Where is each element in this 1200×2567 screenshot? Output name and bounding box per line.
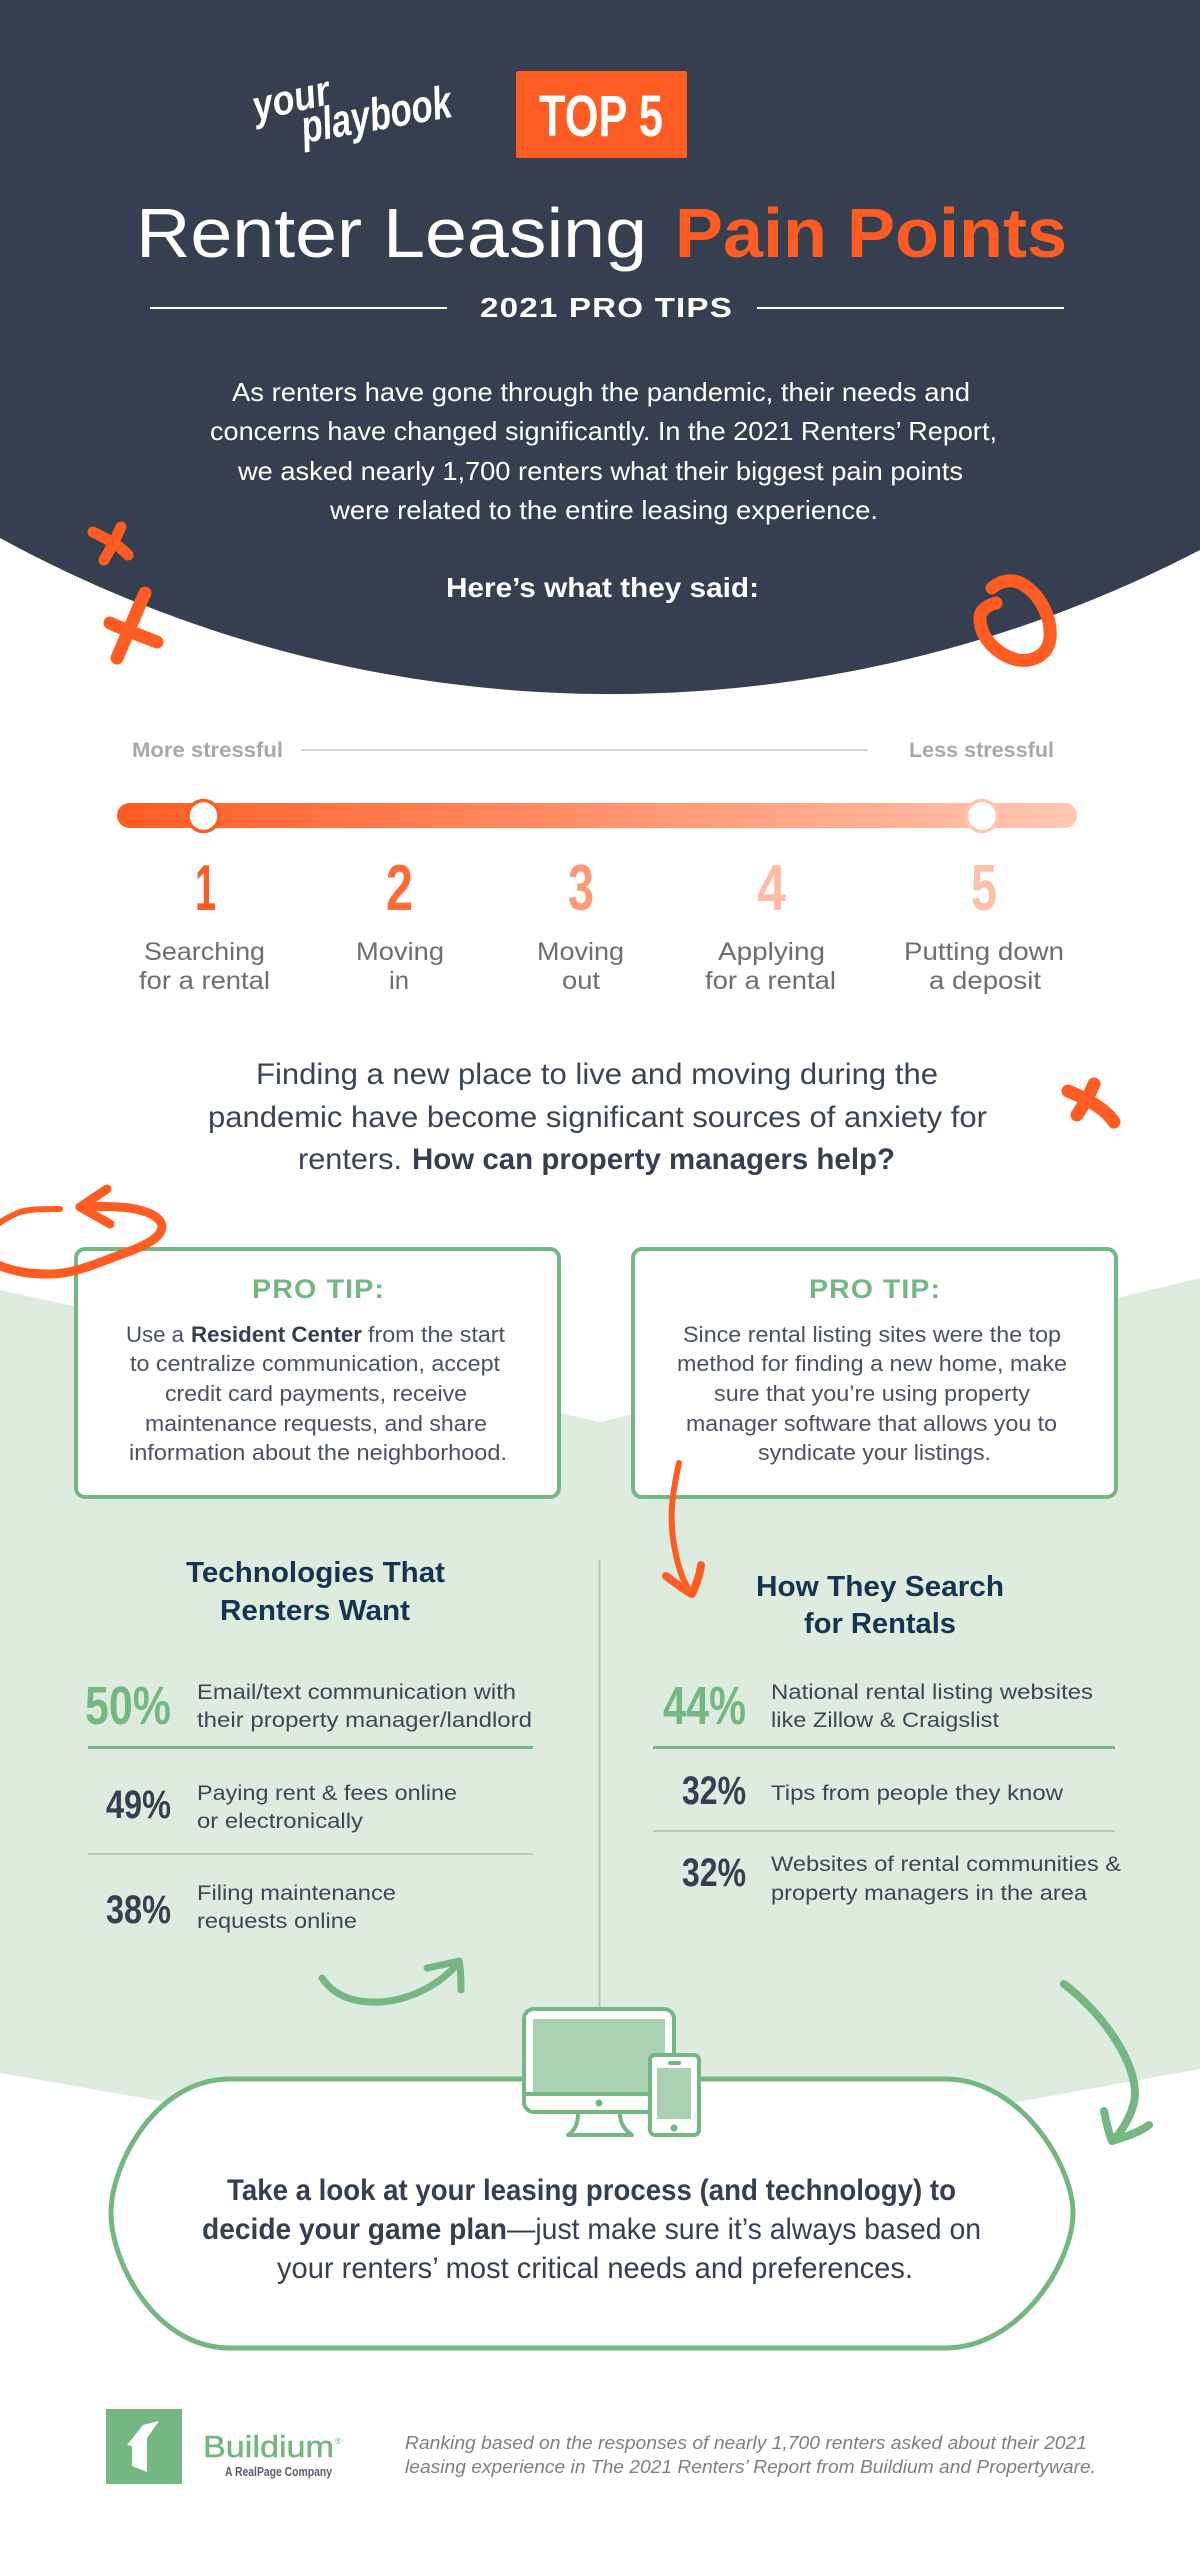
rank 3: moving out: Moving	[537, 938, 624, 966]
heading: how they search for rentals	[756, 1571, 1004, 1640]
panel: closing pill: —just make sure it’s always based on	[507, 2213, 981, 2246]
icon: orange x right	[1068, 1084, 1114, 1122]
transition paragraph	[208, 1058, 987, 1176]
heading: technologies that renters want	[186, 1557, 445, 1627]
icon: green curved arrow	[322, 1961, 461, 2002]
rank 2: moving in: 2	[386, 851, 413, 924]
stress scale labels: More stressful	[132, 739, 283, 762]
rank 2: moving in: in	[389, 967, 409, 995]
gradient stress bar	[117, 800, 1077, 832]
title	[136, 194, 1067, 272]
transition paragraph: How can property managers help?	[412, 1143, 895, 1176]
logo: your playbook: your	[246, 66, 336, 130]
icon: orange circle scribble	[980, 581, 1050, 660]
rank 4: applying for a rental: Applying	[718, 938, 825, 966]
heading: technologies that renters want: Renters Want	[220, 1595, 410, 1627]
panel: closing pill: decide your game plan	[202, 2213, 507, 2246]
logo: buildium	[106, 2409, 342, 2484]
transition paragraph: Finding a new place to live and moving during the	[256, 1058, 938, 1091]
panel: pro tip right: Since rental listing sites were the top	[683, 1322, 1061, 1347]
rank 3: moving out	[537, 851, 624, 995]
stat: 50% email/text: their property manager/landlord	[197, 1708, 532, 1732]
stat: 38% filing maintenance: Filing maintenance	[197, 1881, 396, 1905]
panel: pro tip left: credit card payments, receive	[165, 1381, 467, 1406]
panel: closing pill: your renters’ most critical needs and preferences.	[277, 2252, 913, 2285]
panel: pro tip right: manager software that allows you to	[686, 1411, 1057, 1436]
panel: pro tip right	[633, 1249, 1116, 1497]
footnote: leasing experience in The 2021 Renters’ Report from Buildium and Propertyware.	[405, 2457, 1096, 2477]
heading: how they search for rentals: for Rentals	[804, 1608, 956, 1640]
stat: 44% national listing websites: like Zillow & Craigslist	[771, 1708, 999, 1732]
logo: buildium: ®	[335, 2436, 342, 2446]
intro text: As renters have gone through the pandemic, their needs and	[232, 377, 970, 407]
stat: 49% paying rent	[106, 1781, 457, 1833]
stat: 32% tips from people	[682, 1769, 1064, 1813]
panel: pro tip left: information about the neighborhood.	[129, 1440, 507, 1465]
stat: 50% email/text	[85, 1676, 532, 1736]
panel: pro tip left: Resident Center	[191, 1322, 362, 1347]
stat: 32% tips from people: 32%	[682, 1769, 746, 1813]
logo: your playbook	[246, 66, 457, 153]
intro text	[210, 377, 997, 525]
divider	[598, 1560, 600, 2010]
rank 5: putting down a deposit	[904, 851, 1064, 995]
stress scale labels	[132, 739, 1054, 762]
logo: buildium: Buildium	[203, 2429, 334, 2464]
badge: top 5	[516, 71, 687, 158]
panel: pro tip left: from the start	[368, 1322, 505, 1347]
rank 4: applying for a rental: for a rental	[705, 967, 836, 995]
rank 2: moving in	[356, 851, 444, 995]
stat: 50% email/text: 50%	[85, 1676, 171, 1736]
rank 3: moving out: out	[562, 967, 600, 995]
rank 1: searching for a rental: Searching	[144, 938, 265, 966]
badge: top 5: TOP 5	[539, 84, 663, 149]
panel: pro tip left: Use a	[126, 1322, 185, 1347]
panel: closing pill: Take a look at your leasing process (and technology) to	[227, 2174, 956, 2207]
stat: 49% paying rent: or electronically	[197, 1809, 363, 1833]
intro text: were related to the entire leasing experience.	[329, 495, 878, 525]
stat: 38% filing maintenance: 38%	[106, 1888, 171, 1932]
panel: pro tip left: maintenance requests, and share	[145, 1411, 487, 1436]
header background	[0, 0, 1200, 694]
transition paragraph: pandemic have become significant sources of anxiety for	[208, 1101, 987, 1134]
stat: 32% websites of rental communities: Websites of rental communities &	[771, 1852, 1121, 1876]
stat: 32% websites of rental communities: property managers in the area	[771, 1881, 1087, 1905]
rank 4: applying for a rental	[705, 851, 836, 995]
stress scale labels: Less stressful	[909, 739, 1054, 762]
intro text: concerns have changed significantly. In the 2021 Renters’ Report,	[210, 416, 997, 446]
transition paragraph: renters.	[298, 1143, 402, 1176]
panel: pro tip left: to centralize communication, accept	[130, 1351, 500, 1376]
title: Pain Points	[675, 194, 1067, 272]
intro text: we asked nearly 1,700 renters what their biggest pain points	[237, 456, 963, 486]
subtitle: 2021 pro tips: 2021 PRO TIPS	[480, 292, 733, 323]
panel: pro tip left: PRO TIP:	[252, 1274, 385, 1304]
rank 2: moving in: Moving	[356, 938, 444, 966]
stat: 44% national listing websites: National rental listing websites	[771, 1680, 1093, 1704]
stat: 44% national listing websites: 44%	[663, 1676, 746, 1736]
rank 5: putting down a deposit: Putting down	[904, 938, 1064, 966]
heading: how they search for rentals: How They Search	[756, 1571, 1004, 1603]
stat: 38% filing maintenance	[106, 1881, 396, 1933]
stat: 38% filing maintenance: requests online	[197, 1909, 357, 1933]
green background band	[0, 1278, 1200, 2178]
stat: 50% email/text: Email/text communication with	[197, 1680, 516, 1704]
panel: pro tip right: PRO TIP:	[809, 1274, 941, 1304]
rank 1: searching for a rental: 1	[195, 851, 216, 924]
stat: 49% paying rent: 49%	[106, 1783, 171, 1827]
stat: 32% tips from people: Tips from people they know	[771, 1781, 1064, 1805]
icon: monitor and phone	[524, 2009, 699, 2135]
rank 3: moving out: 3	[568, 851, 594, 924]
stat: 32% websites of rental communities: 32%	[682, 1851, 746, 1895]
rank 1: searching for a rental	[139, 851, 270, 995]
icon: small orange x	[93, 527, 128, 560]
rank 4: applying for a rental: 4	[757, 851, 786, 924]
lead-in: here's what they said: Here’s what they said:	[446, 572, 759, 603]
icon: orange loop arrow	[0, 1189, 162, 1274]
rank 5: putting down a deposit: 5	[971, 851, 997, 924]
icon: large orange x	[110, 593, 157, 658]
footnote	[405, 2433, 1096, 2477]
stat: 32% websites of rental communities	[682, 1851, 1121, 1905]
panel: closing pill	[111, 2079, 1073, 2348]
icon: orange arrow down	[666, 1463, 701, 1594]
title: Renter Leasing	[136, 194, 647, 272]
rank 1: searching for a rental: for a rental	[139, 967, 270, 995]
stat: 44% national listing websites	[663, 1676, 1093, 1736]
rank 5: putting down a deposit: a deposit	[929, 967, 1041, 995]
logo: buildium: A RealPage Company	[225, 2465, 332, 2479]
panel: pro tip right: syndicate your listings.	[758, 1440, 991, 1465]
panel: pro tip right: method for finding a new home, make	[677, 1351, 1067, 1376]
icon: big green arrow	[1064, 1984, 1149, 2141]
heading: technologies that renters want: Technologies That	[186, 1557, 445, 1589]
logo: your playbook: playbook	[295, 75, 457, 153]
panel: pro tip right: sure that you’re using property	[714, 1381, 1030, 1406]
footnote: Ranking based on the responses of nearly 1,700 renters asked about their 2021	[405, 2433, 1087, 2453]
stat: 49% paying rent: Paying rent & fees online	[197, 1781, 457, 1805]
panel: pro tip left	[76, 1249, 559, 1497]
